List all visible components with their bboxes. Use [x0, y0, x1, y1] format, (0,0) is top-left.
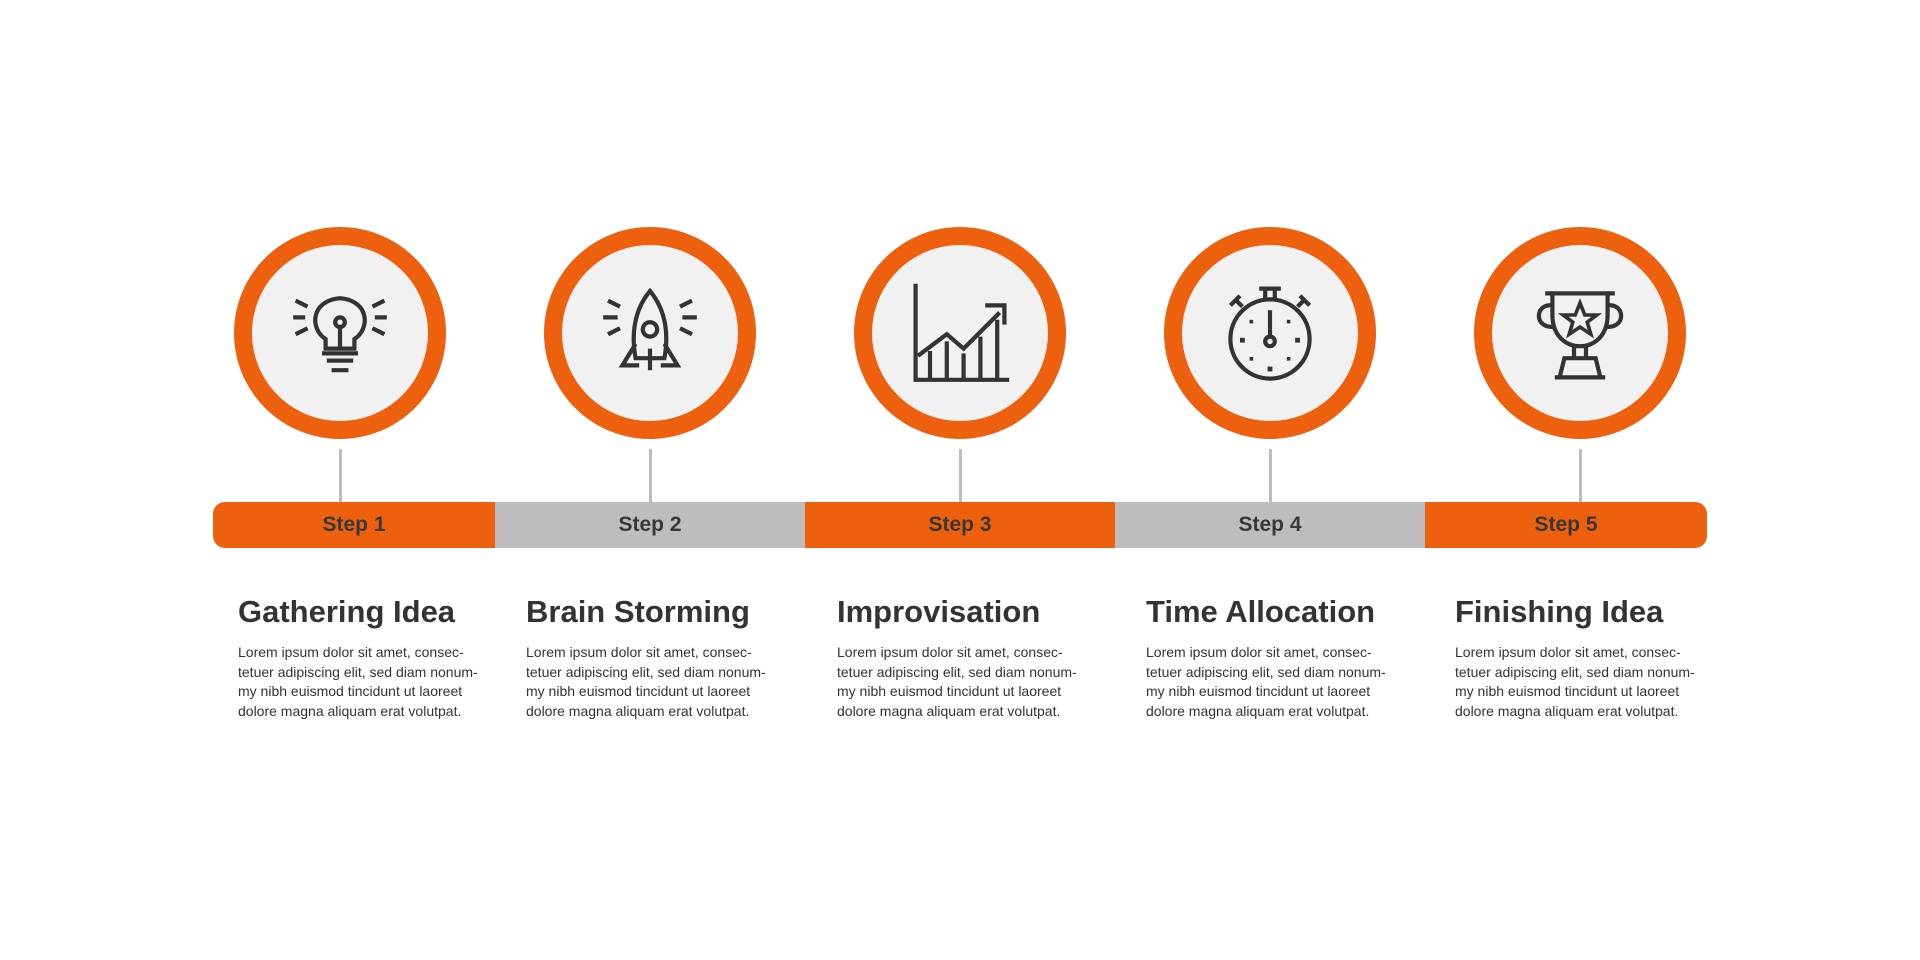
title 1: Gathering Idea — [238, 594, 455, 629]
title 2: Brain Storming — [526, 594, 750, 629]
text 3: tetuer adipiscing elit, sed diam nonum- — [837, 664, 1077, 680]
text 4: Lorem ipsum dolor sit amet, consec- — [1146, 644, 1372, 660]
text 4: my nibh euismod tincidunt ut laoreet — [1146, 683, 1370, 699]
text 1 — [238, 644, 478, 719]
text 1: tetuer adipiscing elit, sed diam nonum- — [238, 664, 478, 680]
step bar: Step 5 — [1534, 513, 1598, 536]
text 5: Lorem ipsum dolor sit amet, consec- — [1455, 644, 1681, 660]
title 4: Time Allocation — [1146, 594, 1375, 629]
step bar: Step 3 — [928, 513, 992, 536]
text 2: dolore magna aliquam erat volutpat. — [526, 703, 749, 719]
title 5: Finishing Idea — [1455, 594, 1663, 629]
text 3: Lorem ipsum dolor sit amet, consec- — [837, 644, 1063, 660]
step bar — [213, 502, 1707, 548]
text 4 — [1146, 644, 1386, 719]
text 5: tetuer adipiscing elit, sed diam nonum- — [1455, 664, 1695, 680]
text 5: my nibh euismod tincidunt ut laoreet — [1455, 683, 1679, 699]
text 4: dolore magna aliquam erat volutpat. — [1146, 703, 1369, 719]
text 2 — [526, 644, 766, 719]
text 4: tetuer adipiscing elit, sed diam nonum- — [1146, 664, 1386, 680]
circle: step 5 trophy — [1474, 227, 1686, 439]
text 3: dolore magna aliquam erat volutpat. — [837, 703, 1060, 719]
step bar: Step 2 — [618, 513, 682, 536]
text 3: my nibh euismod tincidunt ut laoreet — [837, 683, 1061, 699]
text 1: my nibh euismod tincidunt ut laoreet — [238, 683, 462, 699]
text 3 — [837, 644, 1077, 719]
step bar: Step 1 — [322, 513, 386, 536]
connector lines — [339, 449, 1582, 502]
text 2: tetuer adipiscing elit, sed diam nonum- — [526, 664, 766, 680]
circle: step 1 lightbulb — [234, 227, 446, 439]
text 1: Lorem ipsum dolor sit amet, consec- — [238, 644, 464, 660]
circle: step 3 chart — [854, 227, 1066, 439]
text 5 — [1455, 644, 1695, 719]
text 2: Lorem ipsum dolor sit amet, consec- — [526, 644, 752, 660]
text 1: dolore magna aliquam erat volutpat. — [238, 703, 461, 719]
text 2: my nibh euismod tincidunt ut laoreet — [526, 683, 750, 699]
circle: step 2 rocket — [544, 227, 756, 439]
step bar: Step 4 — [1238, 513, 1302, 536]
title 3: Improvisation — [837, 594, 1040, 629]
text 5: dolore magna aliquam erat volutpat. — [1455, 703, 1678, 719]
circle: step 4 stopwatch — [1164, 227, 1376, 439]
